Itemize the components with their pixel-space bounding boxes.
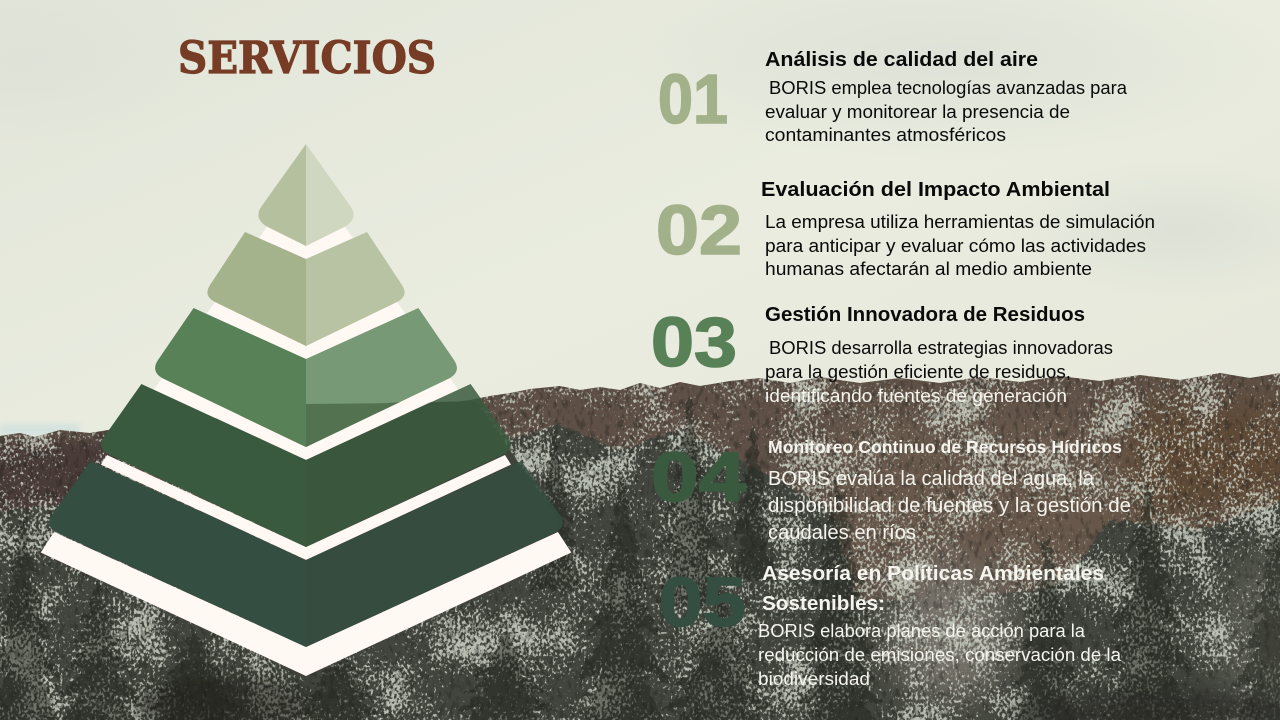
body 03: identificando fuentes de generación — [765, 386, 1067, 406]
body 02: humanas afectarán al medio ambiente — [765, 259, 1092, 279]
service 05 — [659, 563, 1122, 689]
pyramid level 4 — [101, 384, 511, 547]
body 02: La empresa utiliza herramientas de simulación — [765, 212, 1155, 232]
number 05: 05 — [659, 563, 746, 641]
body 04: BORIS evalúa la calidad del agua, la — [768, 468, 1095, 490]
pyramid level 1 — [258, 144, 354, 246]
title: SERVICIOS — [178, 33, 436, 84]
body 05 — [758, 621, 1122, 689]
service 03 — [651, 303, 1113, 406]
heading 03: Gestión Innovadora de Residuos — [765, 304, 1085, 326]
body 01: evaluar y monitorear la presencia de — [765, 102, 1070, 122]
body 05: reducción de emisiones, conservación de la — [758, 645, 1122, 665]
number 04: 04 — [651, 438, 746, 516]
service 02 — [656, 179, 1155, 279]
service 04 — [651, 437, 1131, 544]
heading 05 — [762, 563, 1104, 615]
heading 05: Asesoría en Políticas Ambientales — [762, 563, 1104, 585]
heading 02: Evaluación del Impacto Ambiental — [761, 179, 1110, 201]
body 04: disponibilidad de fuentes y la gestión de — [768, 495, 1131, 517]
number 03: 03 — [651, 303, 737, 381]
pyramid base band — [41, 532, 571, 676]
body 03: BORIS desarrolla estrategias innovadoras — [769, 338, 1113, 358]
body 02 — [765, 212, 1155, 279]
heading 01: Análisis de calidad del aire — [765, 49, 1038, 71]
number 02: 02 — [656, 191, 742, 269]
body 05: biodiversidad — [758, 669, 870, 689]
heading 04: Monitoreo Continuo de Recursos Hídricos — [768, 437, 1122, 457]
number 01: 01 — [658, 60, 728, 138]
pyramid infographic — [41, 144, 571, 676]
body 01: contaminantes atmosféricos — [765, 125, 1006, 145]
body 04: caudales en ríos — [768, 522, 916, 544]
pyramid level 3 — [155, 308, 457, 447]
service 01 — [658, 49, 1128, 145]
body 04 — [768, 468, 1131, 544]
body 03: para la gestión eficiente de residuos, — [765, 362, 1071, 382]
heading 05: Sostenibles: — [762, 593, 885, 615]
body 01: BORIS emplea tecnologías avanzadas para — [769, 78, 1128, 98]
body 03 — [765, 338, 1113, 406]
pyramid level 2 — [207, 232, 405, 346]
body 02: para anticipar y evaluar cómo las actividades — [765, 236, 1146, 256]
body 01 — [765, 78, 1128, 145]
pyramid separators — [101, 227, 511, 560]
body 05: BORIS elabora planes de acción para la — [758, 621, 1086, 641]
pyramid level 5 — [49, 461, 563, 647]
